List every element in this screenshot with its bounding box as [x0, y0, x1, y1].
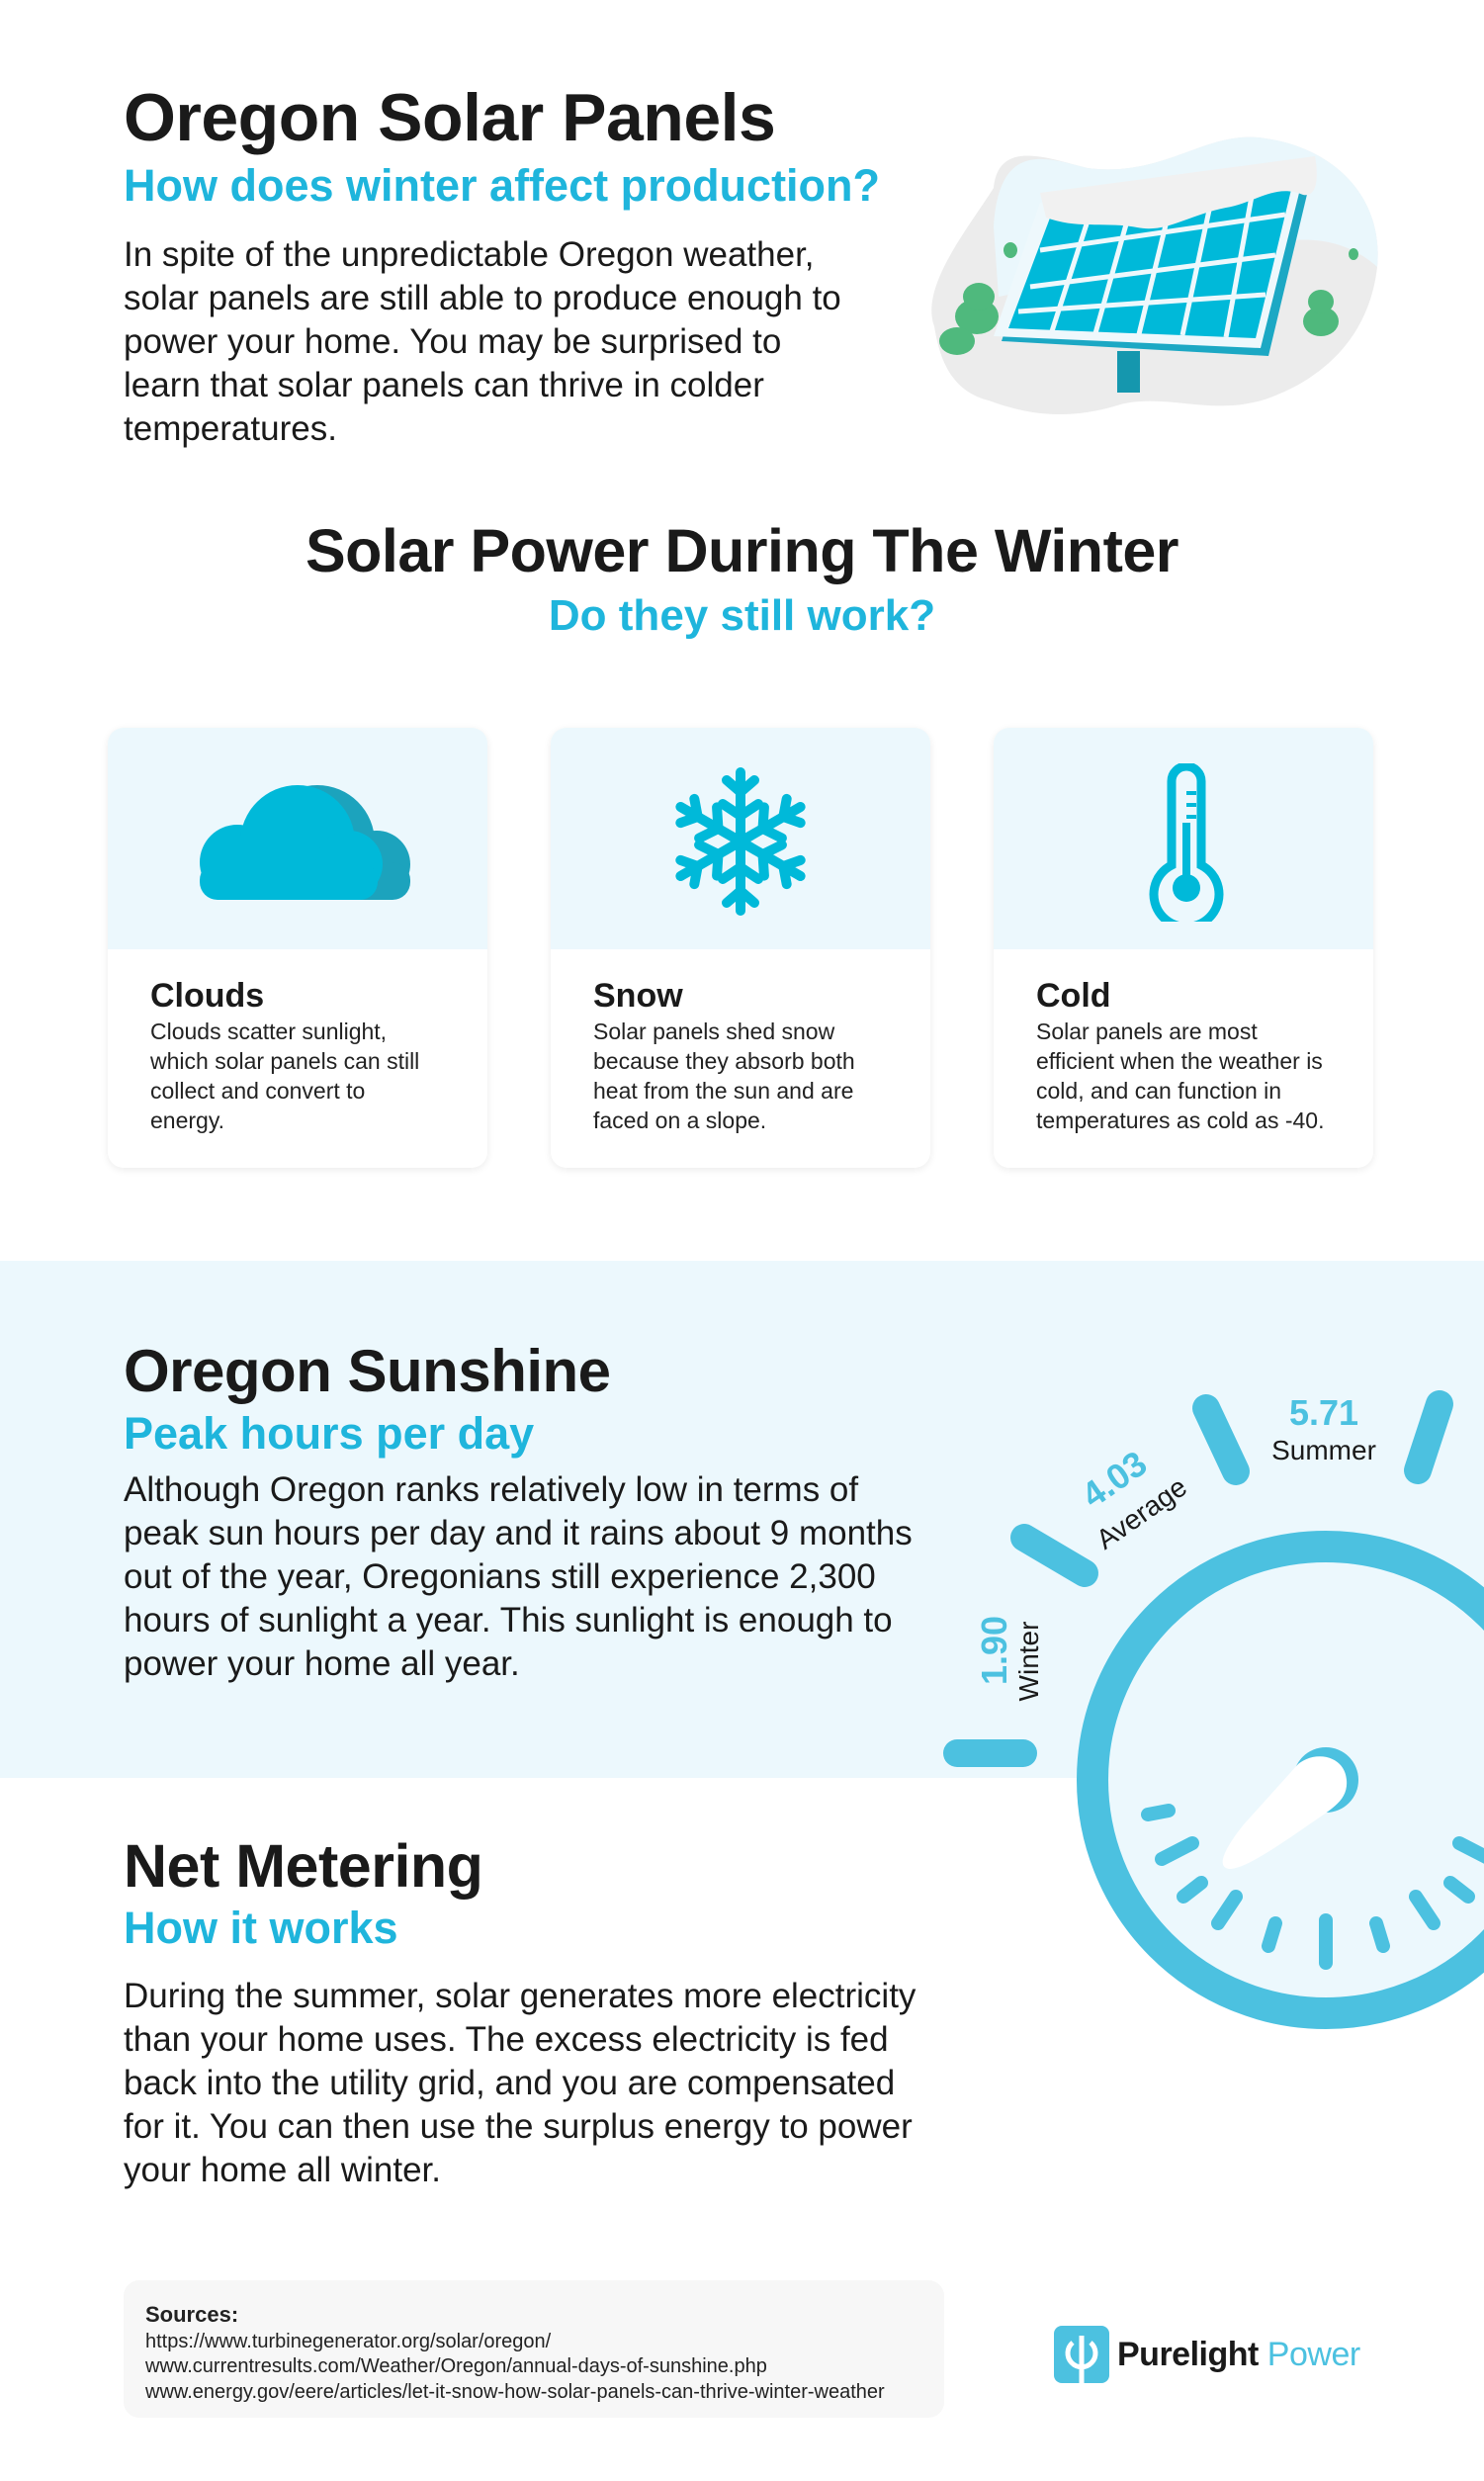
section subheading: Do they still work? [549, 591, 935, 640]
intro text: power your home. You may be surprised to [124, 322, 781, 361]
labels: gauge values: Average [1091, 1471, 1192, 1555]
labels: gauge values [974, 1392, 1376, 1701]
icon: snowflake [551, 728, 930, 949]
card title: Snow [593, 977, 683, 1015]
net metering text: than your home uses. The excess electricity is fed [124, 2020, 889, 2059]
net metering text [124, 1977, 916, 2189]
subtitle: How does winter affect production? [124, 160, 880, 211]
card text: heat from the sun and are [593, 1078, 853, 1104]
card text: Solar panels shed snow [593, 1019, 834, 1044]
card: snow [551, 728, 930, 1168]
sunshine text: power your home all year. [124, 1644, 520, 1683]
heading: Oregon Sunshine: Oregon Sunshine [124, 1338, 611, 1404]
sources box: www.currentresults.com/Weather/Oregon/annual-days-of-sunshine.php [145, 2355, 767, 2377]
card text: energy. [150, 1108, 224, 1133]
intro text: In spite of the unpredictable Oregon weather, [124, 235, 815, 274]
card text: collect and convert to [150, 1078, 365, 1104]
icon: cloud [108, 728, 487, 949]
sunshine text: peak sun hours per day and it rains about 9 months [124, 1514, 913, 1552]
sunshine text: out of the year, Oregonians still experience 2,300 [124, 1557, 876, 1596]
card text [150, 1019, 419, 1133]
illustration: snowy solar panel [931, 136, 1378, 414]
sources box: www.energy.gov/eere/articles/let-it-snow-how-solar-panels-can-thrive-winter-weather [145, 2381, 885, 2403]
panel: sunshine band [0, 1261, 1484, 1778]
card: cold [994, 728, 1373, 1168]
card title: Clouds [150, 977, 264, 1015]
intro text: solar panels are still able to produce enough to [124, 279, 841, 317]
heading: Net Metering: Net Metering [124, 1832, 482, 1900]
net metering text: During the summer, solar generates more electricity [124, 1977, 916, 2015]
net metering text: for it. You can then use the surplus energy to power [124, 2107, 913, 2146]
sunshine text [124, 1470, 913, 1683]
card text: faced on a slope. [593, 1108, 766, 1133]
logo: Purelight Power [1054, 2326, 1360, 2383]
sources box: Sources: [145, 2302, 238, 2327]
intro text: temperatures. [124, 409, 337, 448]
intro text [124, 235, 841, 448]
sources box [124, 2280, 944, 2418]
labels: gauge values: Winter [1013, 1622, 1044, 1701]
labels: gauge values: 5.71 [1289, 1392, 1358, 1433]
card text: cold, and can function in [1036, 1078, 1281, 1104]
subheading: Peak hours per day [124, 1408, 534, 1459]
chart: sun hours gauge [943, 1390, 1484, 2029]
subheading: How it works [124, 1903, 398, 1953]
logo: Purelight Power: Purelight Power [1117, 2336, 1360, 2373]
section heading: Solar Power During The Winter [306, 517, 1178, 584]
net metering text: your home all winter. [124, 2151, 441, 2189]
net metering text: back into the utility grid, and you are compensated [124, 2064, 895, 2102]
card text: efficient when the weather is [1036, 1048, 1323, 1074]
card text [1036, 1019, 1324, 1133]
intro text: learn that solar panels can thrive in colder [124, 366, 764, 404]
labels: gauge values: 1.90 [974, 1616, 1014, 1685]
card text: Clouds scatter sunlight, [150, 1019, 387, 1044]
sunshine text: Although Oregon ranks relatively low in terms of [124, 1470, 858, 1509]
card title: Cold [1036, 977, 1111, 1015]
labels: gauge values: 4.03 [1074, 1443, 1154, 1516]
card text: because they absorb both [593, 1048, 855, 1074]
title: Oregon Solar Panels [124, 80, 775, 155]
sunshine text: hours of sunlight a year. This sunlight is enough to [124, 1601, 893, 1639]
labels: gauge values: Summer [1271, 1435, 1376, 1465]
card text [593, 1019, 855, 1133]
card text: Solar panels are most [1036, 1019, 1258, 1044]
sources box: https://www.turbinegenerator.org/solar/oregon/ [145, 2330, 551, 2351]
card text: temperatures as cold as -40. [1036, 1108, 1324, 1133]
icon: thermometer [994, 728, 1373, 949]
card: clouds [108, 728, 487, 1168]
card text: which solar panels can still [150, 1048, 419, 1074]
